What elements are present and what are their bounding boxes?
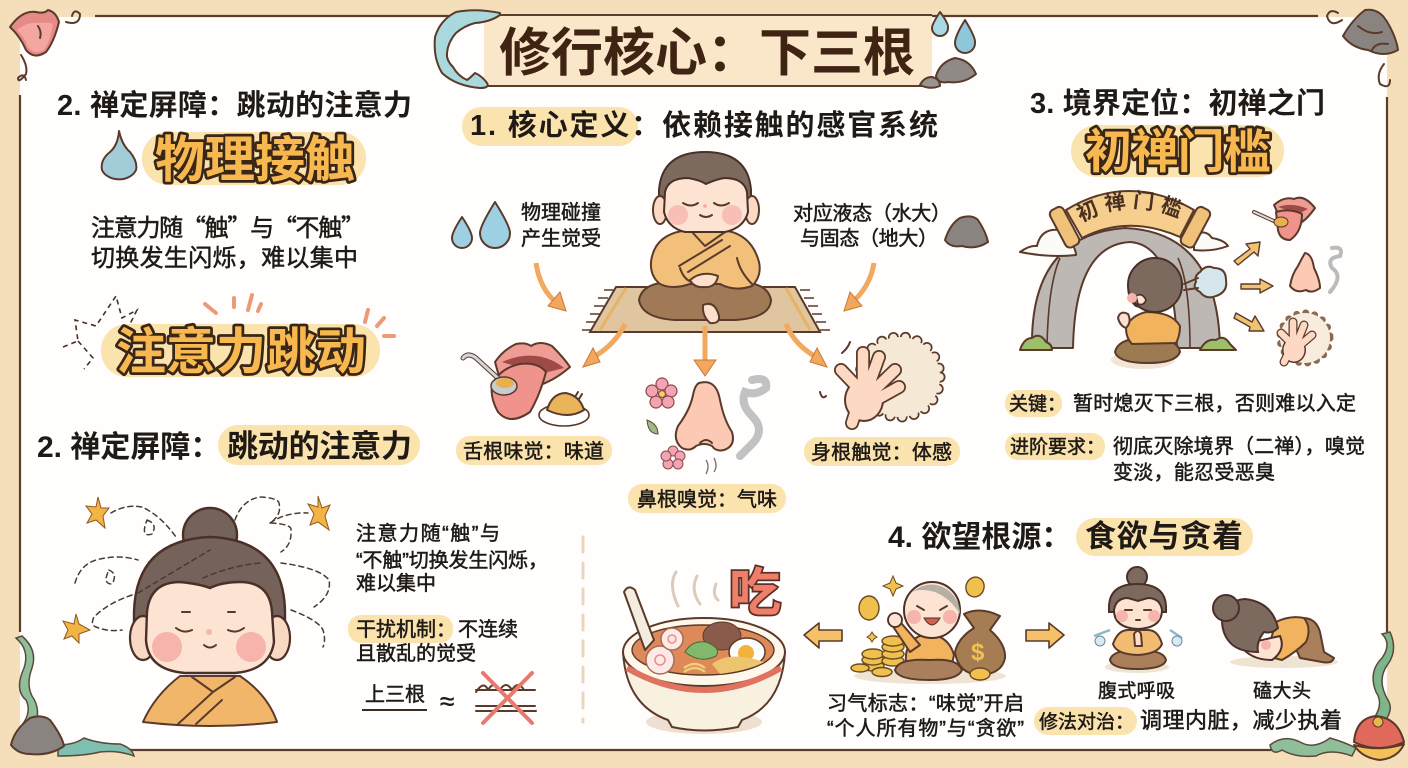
meditation mat [582, 287, 830, 332]
icon: breath puff [1184, 267, 1226, 297]
monk head portrait [130, 508, 290, 726]
corner swirl and rock bottom left [11, 636, 134, 756]
title ribbon [484, 15, 932, 86]
icon: prostrating monk [1213, 595, 1338, 668]
shadow [646, 710, 762, 734]
icon: tongue tasting [463, 343, 589, 426]
text block: advanced requirement: 变淡，能忍受恶臭 [1113, 461, 1275, 484]
head [904, 582, 960, 638]
heading with pill: 4. 欲望根源： [888, 521, 1071, 554]
caption: breathing: 腹式呼吸 [1098, 680, 1175, 702]
caption: habit sign: “个人所有物”与“贪欲” [827, 717, 1024, 740]
heading with pill [37, 425, 420, 465]
icon: greedy monk with coins [851, 575, 1006, 684]
comparison: upper roots vs crossed lines: ≈ [440, 686, 454, 716]
body text: 注意力随“触”与“不触” [91, 208, 365, 243]
pill: threshold: 初禅门槛 [1085, 125, 1271, 178]
caption: liquid and solid: 对应液态（水大） [793, 202, 951, 225]
icon: stone arch: 初禅门槛 [1076, 190, 1184, 222]
ears [130, 616, 156, 660]
fluffy ball [860, 337, 940, 417]
heading: 3. 境界定位：初禅之门 [1030, 87, 1325, 120]
cheeks and eyes [152, 612, 266, 662]
text block: key: 暂时熄灭下三根，否则难以入定 [1073, 392, 1356, 415]
caption: habit sign: 习气标志：“味觉”开启 [827, 692, 1024, 715]
face [146, 582, 274, 673]
torso [651, 231, 760, 289]
comparison: upper roots vs crossed lines [362, 673, 536, 723]
label: nose smell: 鼻根嗅觉：气味 [637, 488, 777, 511]
icon: stone arch [1019, 190, 1237, 351]
text block: advanced requirement: 彻底灭除境界（二禅），嗅觉 [1113, 435, 1365, 458]
text block: distraction: 注意力随“触”与 [356, 522, 500, 545]
scrolls [1048, 205, 1081, 249]
heading with pill: 跳动的注意力 [227, 429, 412, 464]
caption: liquid and solid [793, 202, 951, 250]
bushes [1020, 336, 1052, 350]
sparkles [867, 576, 903, 642]
panel: core definition [452, 107, 988, 513]
ears [653, 196, 667, 224]
steam [672, 572, 718, 606]
label: tongue taste: 舌根味觉：味道 [463, 440, 604, 463]
heading: 2. 禅定屏障：跳动的注意力 [57, 89, 412, 122]
caption: physical collision: 物理碰撞 [521, 201, 601, 224]
panel: attention upper left [57, 89, 412, 380]
text block: advanced requirement: 进阶要求： [1010, 436, 1105, 458]
caption: habit sign [827, 692, 1024, 740]
text block: key [1005, 390, 1356, 417]
text block: interference mechanism: 且散乱的觉受 [356, 642, 476, 665]
panel: first dhyana threshold [1005, 87, 1365, 484]
pill: attention jumping: 注意力跳动 [116, 324, 366, 380]
text block: countermeasure [1034, 707, 1342, 735]
icon: rock [945, 216, 988, 247]
icon: orange ticks [205, 295, 394, 336]
title text: 修行核心：下三根 [499, 25, 915, 83]
bowl rim [623, 618, 785, 686]
arrows to senses [1234, 242, 1273, 331]
face [664, 178, 748, 232]
heading with pill [888, 518, 1253, 556]
flower [646, 378, 677, 408]
foot and hands [703, 304, 719, 323]
caption: physical collision [521, 201, 601, 250]
icon: corner rock top right [1327, 10, 1398, 86]
caption: prostration: 磕大头 [1253, 680, 1311, 702]
text block: interference mechanism [348, 615, 518, 665]
dashed motion lines [75, 497, 329, 647]
label: tongue taste [456, 436, 612, 465]
corner swirl and fruit bottom right [1270, 632, 1404, 760]
icon: greedy monk with coins: $ [971, 639, 985, 666]
arrow left [804, 623, 842, 648]
icon: abdominal breathing monk [1094, 567, 1182, 673]
money bag [955, 610, 1005, 675]
icon: hand touching ball [820, 337, 940, 423]
icon: noodle bowl [623, 565, 785, 734]
icon: water drop [102, 131, 136, 179]
icon: corner tongue [10, 10, 80, 80]
icon: water drops [452, 202, 510, 248]
icon: nose and smells [646, 378, 766, 474]
hair [134, 537, 285, 622]
divider [582, 537, 584, 722]
text block: interference mechanism: 干扰机制： [356, 618, 456, 641]
label: body touch [804, 437, 960, 466]
text block: interference mechanism: 不连续 [458, 618, 518, 641]
label: nose smell [628, 484, 786, 513]
monk meditating [639, 152, 771, 323]
robe [906, 634, 954, 664]
icon: mini tongue [1254, 198, 1315, 240]
panel: attention lower left [37, 425, 548, 726]
bun [183, 508, 237, 562]
banner [1066, 191, 1194, 238]
icon: mini hand and ball [1280, 313, 1330, 363]
coins [851, 575, 990, 680]
bowl body [623, 652, 785, 730]
text block: countermeasure: 修法对治： [1039, 711, 1134, 733]
facial features [668, 203, 742, 225]
heading with pill: 食欲与贪着 [1085, 519, 1243, 554]
monk seen from behind [1111, 258, 1182, 369]
body text: 切换发生闪烁，难以集中 [91, 238, 358, 273]
pill: physical contact: 物理接触 [155, 132, 355, 188]
heading with pill: 1. 核心定义：依赖接触的感官系统 [470, 109, 938, 142]
spoon [624, 587, 654, 650]
toppings [646, 622, 765, 674]
hair [659, 152, 751, 204]
arrow right [1026, 623, 1064, 648]
text block: advanced requirement [1005, 433, 1365, 484]
hand fill [841, 353, 899, 423]
icon: stars [63, 496, 330, 643]
comparison: upper roots vs crossed lines: 上三根 [365, 683, 425, 706]
text block: distraction: “不触”切换发生闪烁， [356, 549, 548, 572]
heading with pill: 2. 禅定屏障： [37, 431, 220, 464]
icon: water drops [932, 12, 975, 53]
icon: mini nose [1290, 248, 1341, 292]
text block: distraction: 难以集中 [356, 572, 436, 595]
arrowheads [548, 292, 862, 376]
title banner [435, 10, 976, 88]
labels: sense roots [456, 436, 960, 513]
small flower [661, 446, 685, 469]
robe [143, 676, 277, 726]
red stripe [627, 668, 781, 690]
body text [91, 208, 365, 273]
soup [632, 625, 774, 675]
caption: liquid and solid: 与固态（地大） [800, 227, 938, 250]
panel: root of desire [623, 518, 1342, 740]
legs [639, 282, 771, 320]
label: body touch: 身根触觉：体感 [811, 441, 952, 464]
clouds [1020, 230, 1076, 256]
legs [895, 660, 962, 680]
text block: countermeasure: 调理内脏，减少执着 [1140, 708, 1342, 733]
icon: dashed spark burst [63, 296, 137, 369]
caption: physical collision: 产生觉受 [521, 227, 601, 250]
icon: rocks [920, 58, 976, 88]
arrows to senses [536, 263, 874, 360]
text block: key: 关键： [1009, 393, 1066, 415]
hand outline [841, 353, 899, 423]
icon: water swirl [435, 10, 500, 88]
text block: distraction [356, 522, 548, 595]
eat character: 吃 [729, 565, 781, 623]
